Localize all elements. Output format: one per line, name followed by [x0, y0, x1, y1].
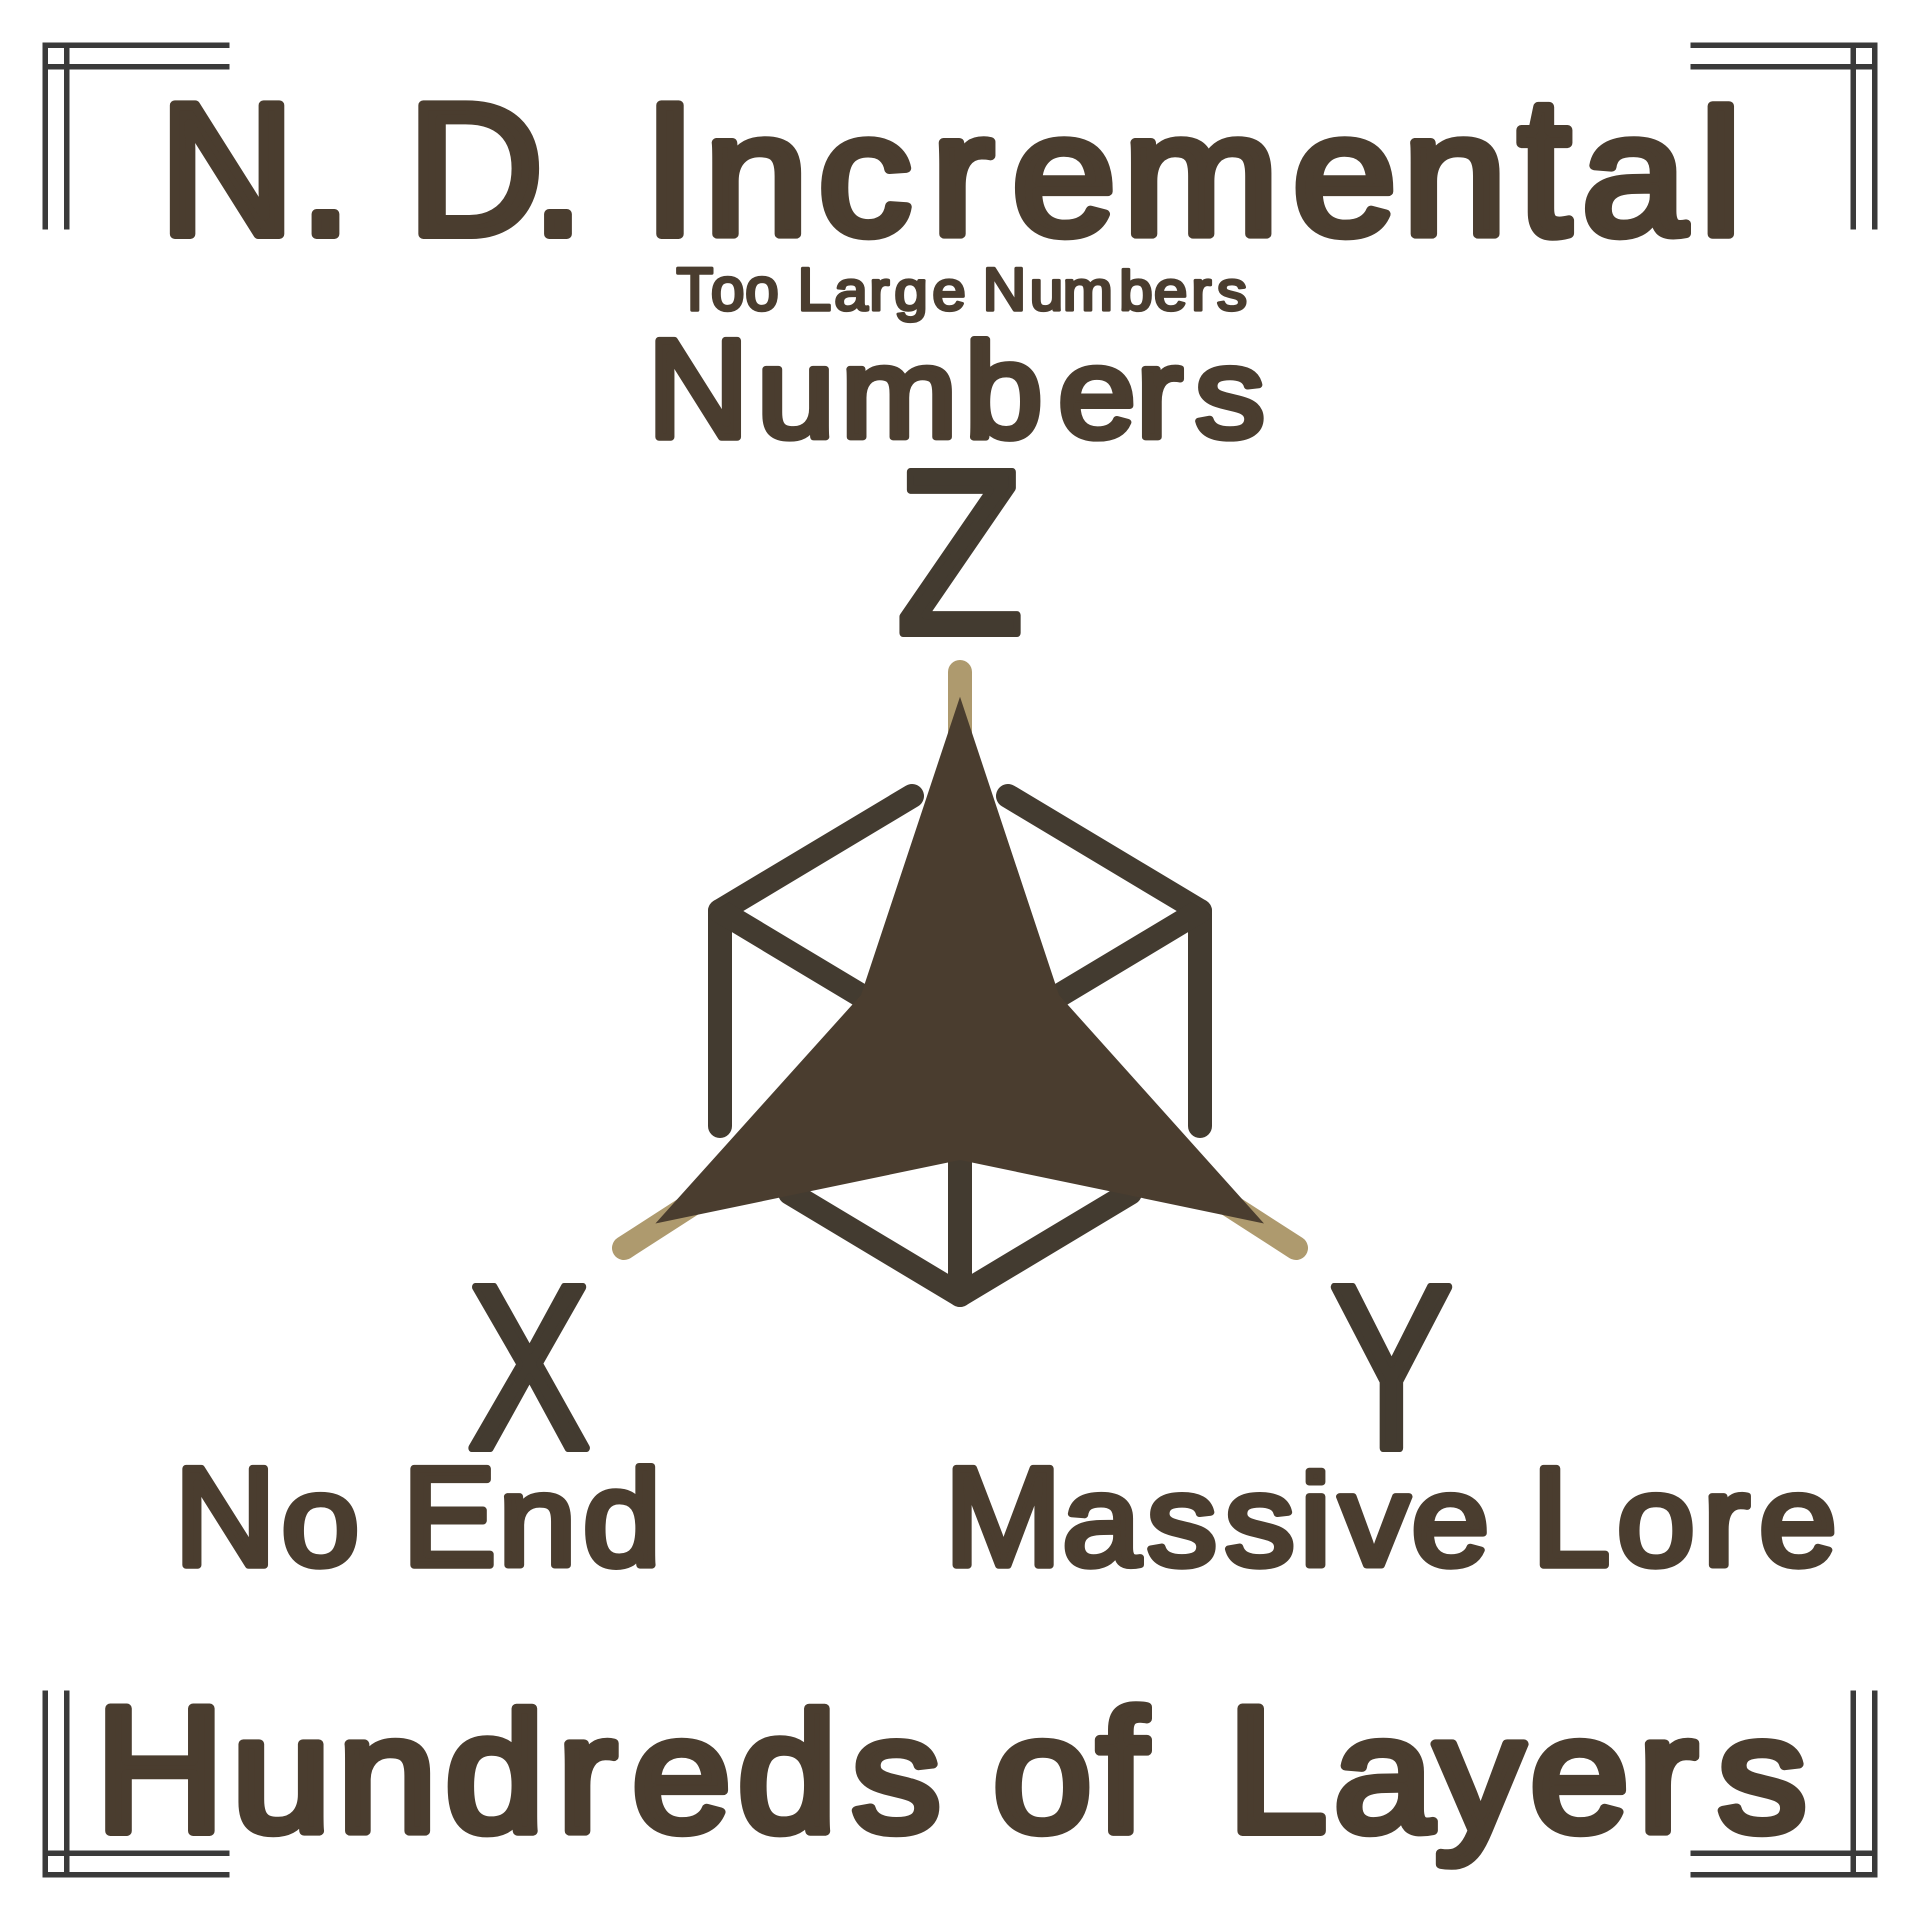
axis letter Y: Y: [1330, 1236, 1453, 1498]
title: I: [644, 65, 696, 274]
corner frame: top right: [1690, 42, 1878, 230]
label: Y axis: assive: [1062, 1448, 1489, 1593]
title: ncremen: [704, 78, 1507, 271]
title: D.: [408, 65, 584, 274]
data shape: [655, 697, 1264, 1224]
subtitle: L: [798, 256, 831, 323]
label: Z axis: um: [757, 322, 957, 465]
footer heading: L: [1228, 1670, 1327, 1869]
footer heading: s: [852, 1683, 941, 1867]
title: N.: [160, 65, 351, 274]
subtitle: umbers: [1030, 261, 1247, 323]
hexagon grid: [720, 796, 1200, 1295]
corner frame: top left: [42, 42, 230, 230]
footer heading: o: [993, 1683, 1092, 1867]
label: X axis: d: [583, 1443, 661, 1595]
corner frame: bottom left: [42, 1690, 230, 1878]
label: Z axis: N: [648, 310, 749, 467]
footer heading: d: [738, 1678, 837, 1867]
subtitle: Too: [676, 256, 779, 323]
label: Z axis: b: [965, 317, 1043, 466]
label: Y axis: L: [1532, 1438, 1610, 1595]
axis letter Z: Z: [896, 421, 1024, 683]
subtitle: N: [983, 256, 1026, 323]
subtitle: [676, 256, 1247, 323]
label: Y axis: [945, 1438, 1837, 1595]
footer heading: un: [232, 1683, 437, 1867]
title: l: [1700, 74, 1742, 272]
footer heading: re: [557, 1683, 731, 1867]
axes in tan: [624, 672, 1296, 1248]
label: X axis: n: [498, 1448, 576, 1593]
title: t: [1518, 56, 1570, 276]
label: X axis: [175, 1438, 661, 1595]
label: X axis: o: [281, 1448, 359, 1593]
title: a: [1582, 78, 1687, 271]
label: X axis: E: [403, 1438, 496, 1595]
title: [160, 56, 1742, 276]
label: Z axis: ers: [1058, 322, 1265, 465]
footer heading: [96, 1670, 1807, 1869]
label: Z axis: [648, 310, 1265, 467]
footer heading: ayers: [1334, 1683, 1807, 1867]
label: Y axis: ore: [1617, 1448, 1837, 1593]
corner frame: bottom right: [1690, 1690, 1878, 1878]
radar chart: [624, 672, 1296, 1295]
footer heading: f: [1097, 1675, 1147, 1868]
label: X axis: N: [175, 1438, 276, 1595]
subtitle: arge: [834, 261, 966, 323]
footer heading: H: [96, 1670, 224, 1869]
footer heading: d: [445, 1678, 544, 1867]
label: Y axis: M: [945, 1438, 1061, 1595]
axis letter X: X: [467, 1236, 591, 1498]
